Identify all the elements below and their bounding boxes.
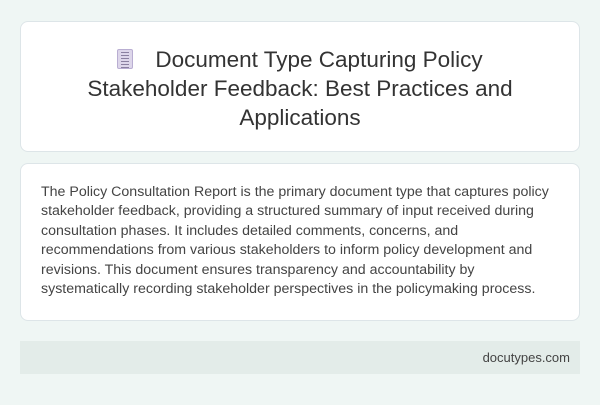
- panel: title card: [20, 21, 580, 152]
- panel: description: [20, 163, 580, 321]
- text block: description: The Policy Consultation Report is the primary document type that captures policy stakeholder feedback, providing a structured summary of input received during consultation phases. It includes detailed comments, concerns, and recommendations from various stakeholders to inform policy development and revisions. This document ensures transparency and accountability by systematically recording stakeholder perspectives in the policymaking process.: [41, 184, 549, 297]
- icon: document: [117, 49, 133, 69]
- footer text: docutypes.com: [483, 350, 570, 365]
- title: Document Type Capturing Policy: [155, 47, 483, 72]
- title: Stakeholder Feedback: Best Practices and: [87, 76, 513, 101]
- footer: [20, 341, 580, 374]
- title: Applications: [239, 105, 361, 130]
- title: [87, 47, 513, 130]
